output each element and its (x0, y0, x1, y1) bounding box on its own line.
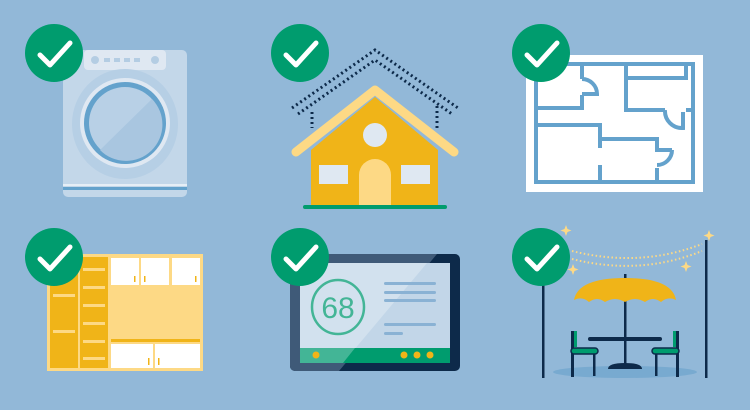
icon: floor plan (526, 55, 703, 192)
icon: patio (542, 225, 714, 378)
icon: cabinets (47, 254, 203, 371)
icon: washing machine (63, 50, 187, 197)
icon: thermostat tablet (290, 254, 460, 371)
text: temperature 68: 68 (321, 292, 355, 325)
icon: house (292, 50, 458, 209)
icon: check marks (25, 24, 570, 286)
